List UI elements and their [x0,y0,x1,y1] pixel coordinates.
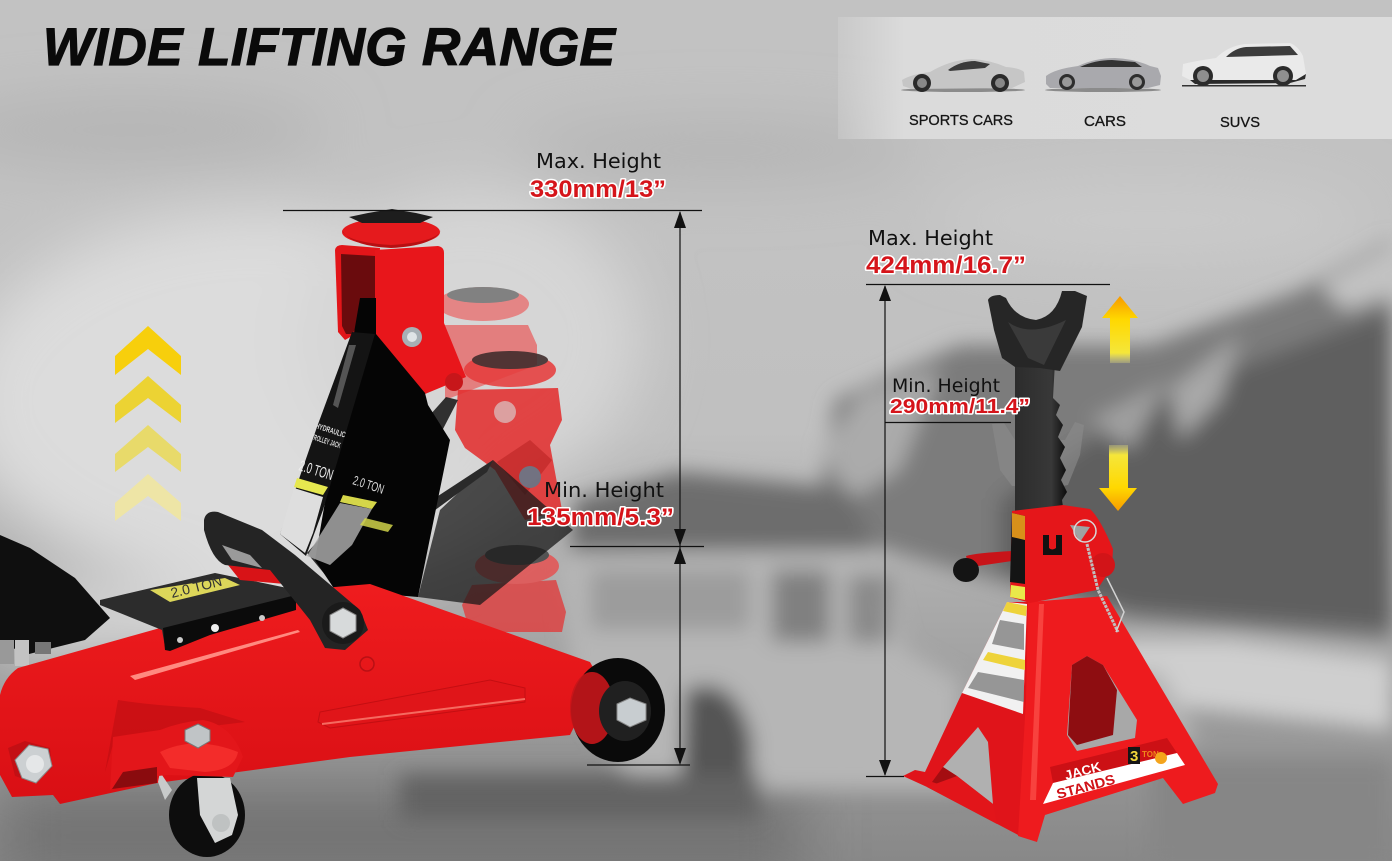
title: WIDE LIFTING RANGE [43,18,617,77]
jack max height text: Max. Height [536,149,661,173]
deck label: 2.0 TON [169,573,224,601]
black rear handle section [0,535,110,655]
ghost: lowered saddle [462,545,566,632]
jack max height text [530,149,666,203]
main black lift arm [280,298,463,597]
front right face [1018,596,1218,842]
main saddle and bracket [335,209,466,394]
vehicle types [901,43,1306,131]
U-shaped slot [1043,535,1062,555]
front hex bolt [8,741,52,783]
stand min height text: 290mm/11.4” [890,396,1030,418]
ghost: mid saddle low [455,351,562,520]
icon: SUV [1182,43,1306,86]
chain [1087,544,1118,632]
label yellow warning strip [294,478,328,495]
label: SUVs: SUVS [1220,114,1260,131]
body shade [105,700,245,772]
saddle [988,291,1087,371]
handle socket [204,512,368,650]
lowered saddle ghost [992,422,1084,487]
caster wheel [110,720,245,857]
rear wheel [570,658,665,762]
rear fittings [0,640,51,666]
left arch opening [943,727,993,804]
main stand body [903,505,1218,842]
main black lift arm: 2.0 TON [297,458,335,484]
jack min height text [527,478,674,531]
front edge highlight [1030,604,1044,800]
main black lift arm: TROLLEY JACK [310,432,342,450]
lock pin [1091,553,1115,577]
dimension lines: trolley jack [283,210,704,765]
stand max height text: Max. Height [868,226,993,250]
label white instructions [280,488,323,553]
stand max height text: 424mm/16.7” [866,252,1026,279]
hydraulic trolley jack [0,209,665,857]
label: sports cars: SPORTS CARS [909,112,1013,129]
right window opening [1067,656,1137,751]
arrow: jack stand up [1102,296,1138,363]
jack max height text: 330mm/13” [530,176,666,203]
ratchet post [988,291,1087,514]
base label [1043,738,1185,804]
base label: JACK [1063,759,1103,783]
arrow: jack stand down [1099,445,1137,511]
icon: sedan car [1045,58,1161,92]
body highlight [130,630,300,680]
ghost: lowered arms [307,397,573,605]
jack stand [903,291,1218,842]
third ghost label [360,518,393,532]
jack min height text: 135mm/5.3” [527,504,674,531]
red link under handle [228,562,296,585]
top-right vehicles panel background [838,17,1392,139]
body side slot [318,680,525,728]
stand max height text [866,226,1026,279]
ghost: mid saddle high [437,287,537,400]
ghost arm label [307,503,372,565]
collar [1010,505,1113,603]
dimension lines: jack stand [866,284,1110,776]
stand min height text [890,375,1030,418]
handle [953,551,1012,582]
main black lift arm: 2.0 TON [351,473,386,497]
base label: 3 [1130,748,1138,765]
base label: STANDS [1055,771,1117,802]
main red body [0,584,600,804]
icon: yellow upward chevrons [115,326,181,521]
stand min height text: Min. Height [892,375,1000,397]
red pivot pin [445,373,463,391]
jack min height text: Min. Height [544,478,664,502]
warning labels [962,513,1027,714]
jack label text: HYDRAULIC [314,421,347,440]
icon: sports car [901,59,1025,92]
black deck plate [100,573,297,651]
label: cars: CARS [1084,113,1126,130]
left face [903,602,1030,836]
left floor plate [927,776,997,824]
base label: TON [1142,750,1159,759]
